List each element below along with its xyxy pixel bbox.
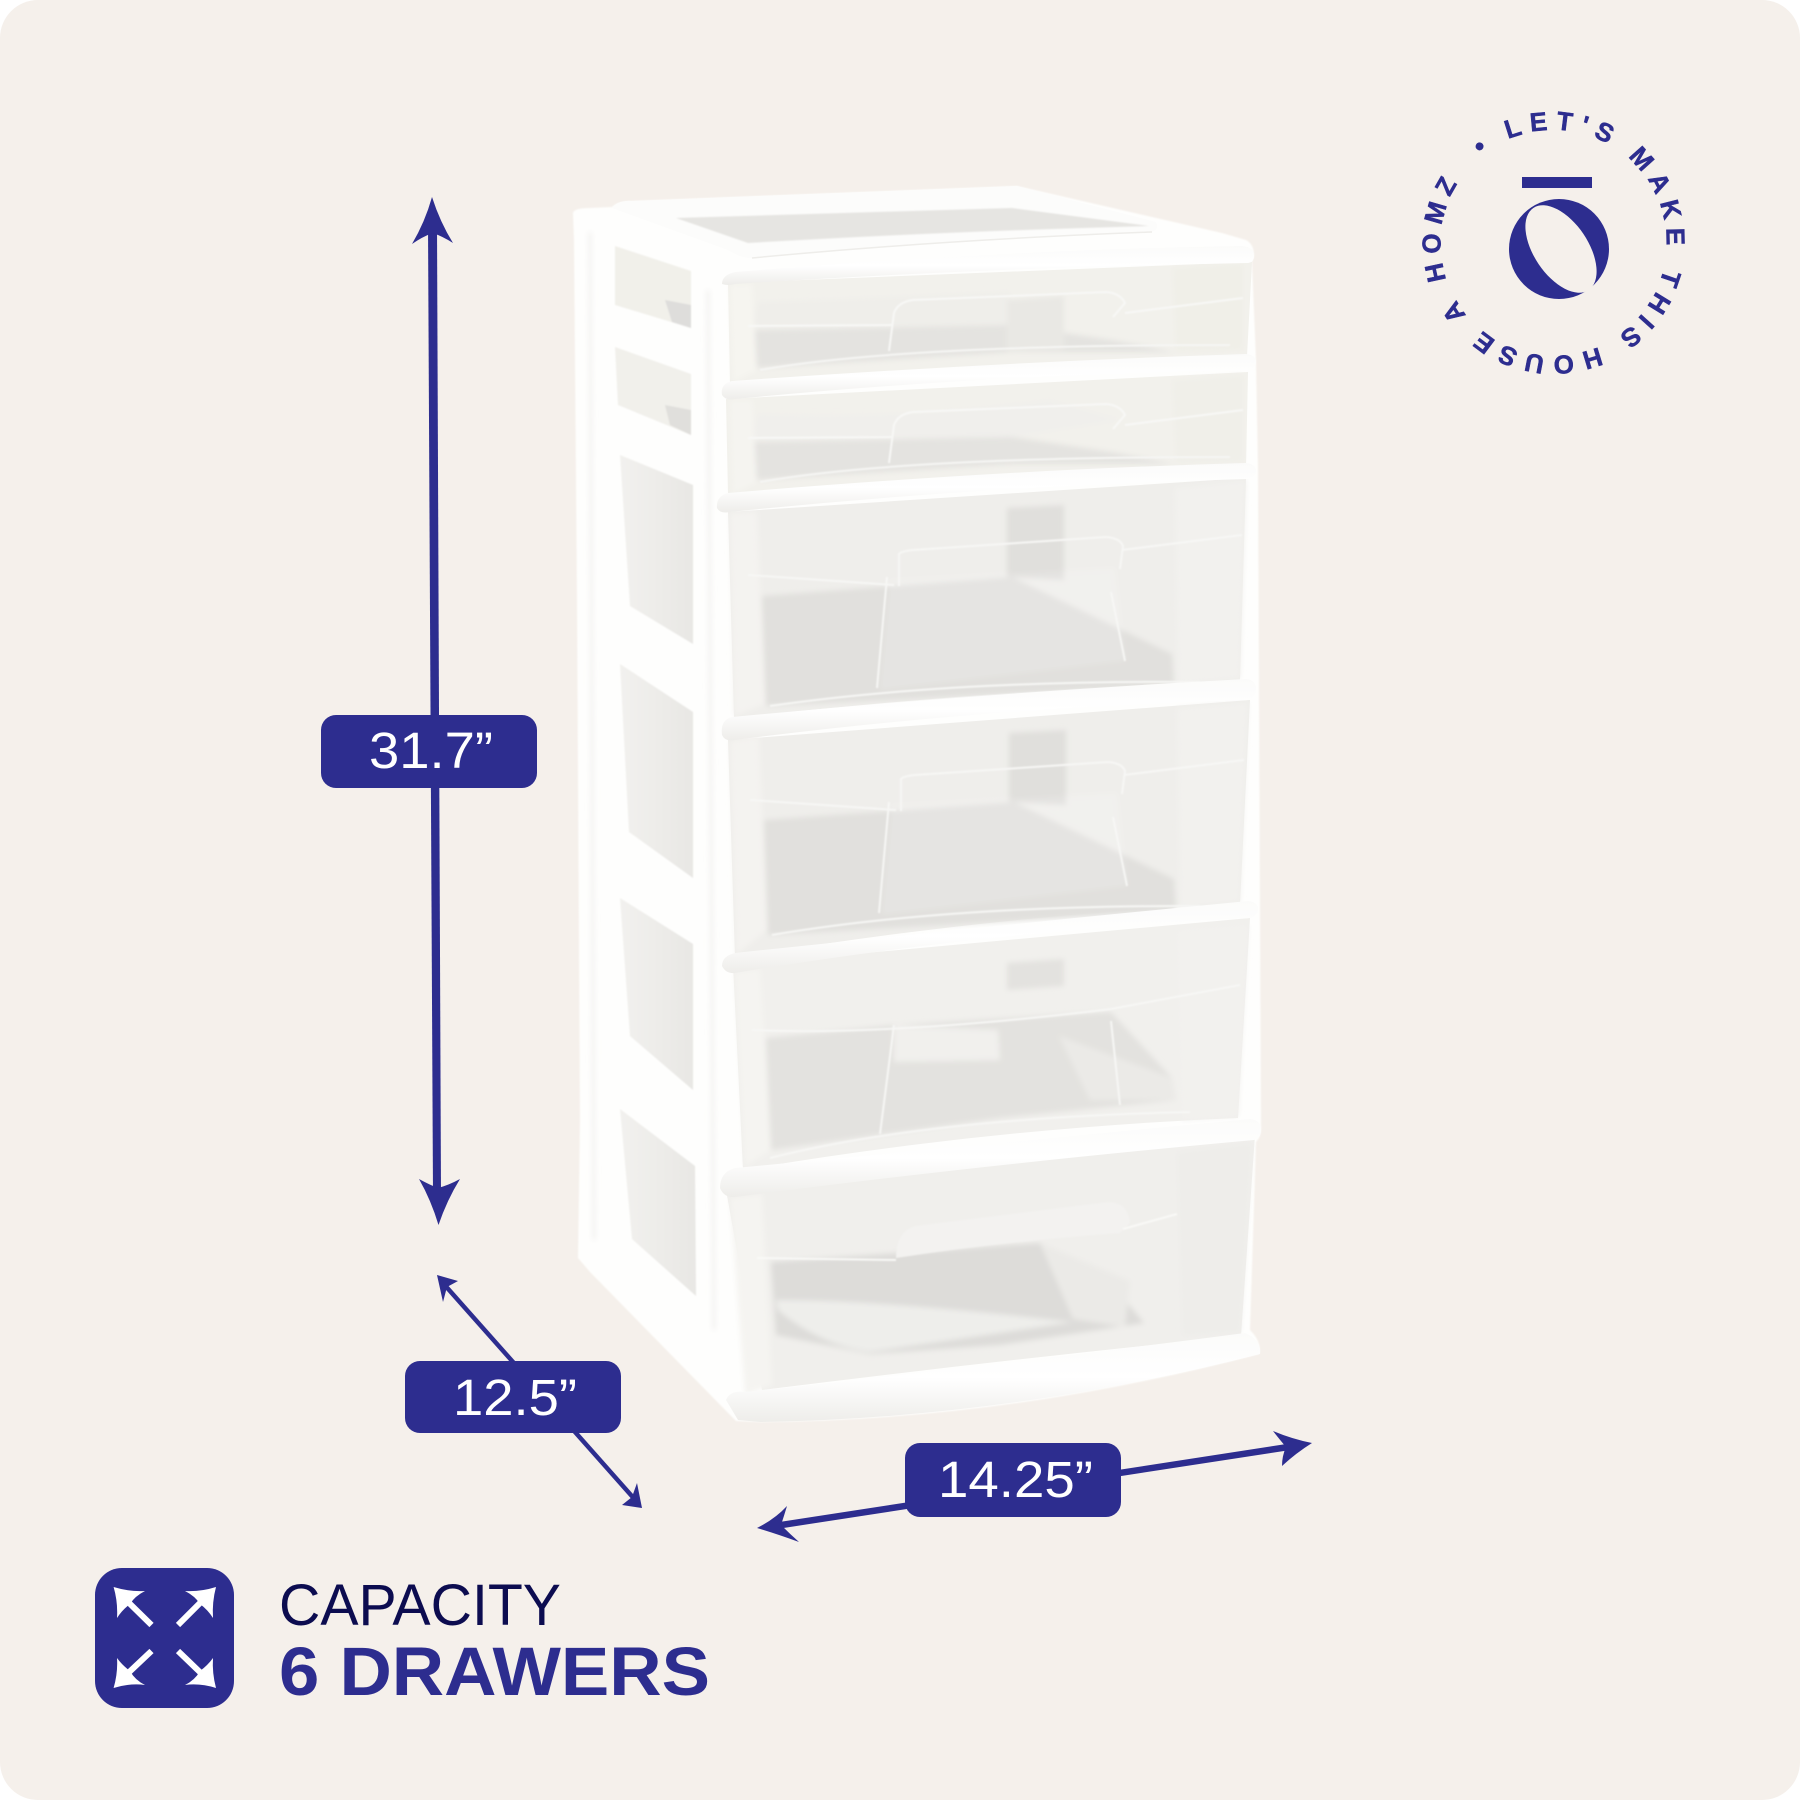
drawer 4 bbox=[728, 700, 1250, 958]
arrow: depth dimension bbox=[437, 1275, 642, 1508]
unit silhouette bbox=[573, 186, 1261, 1422]
handle bbox=[896, 1202, 1130, 1258]
label: depth 12.5: 12.5” bbox=[453, 1369, 577, 1426]
frame post shading bbox=[590, 232, 714, 1330]
drawer 6 bbox=[726, 1135, 1255, 1395]
brand badge bbox=[1422, 111, 1685, 374]
lid bbox=[612, 186, 1157, 258]
logo ring bbox=[1509, 199, 1609, 299]
circular slogan: • LET'S MAKE THIS HOUSE A HOMZ bbox=[1422, 111, 1685, 374]
capacity icon bbox=[95, 1568, 234, 1708]
arrow: height dimension bbox=[412, 197, 460, 1225]
logo bar bbox=[1522, 177, 1592, 188]
label: height 31.7 bbox=[321, 715, 537, 788]
label: width 14.25: 14.25” bbox=[938, 1451, 1093, 1508]
drawer 5 bbox=[733, 918, 1250, 1170]
label: depth 12.5 bbox=[405, 1361, 621, 1433]
product photo: six-drawer plastic storage tower bbox=[573, 186, 1261, 1422]
drawer 2 bbox=[726, 372, 1248, 495]
capacity text bbox=[279, 1573, 710, 1710]
label: height 31.7: 31.7” bbox=[369, 722, 493, 779]
capacity label: CAPACITY bbox=[279, 1573, 561, 1638]
side windows bbox=[615, 246, 696, 1296]
drawer front rails bbox=[717, 246, 1261, 1422]
drawer 3 bbox=[728, 478, 1246, 718]
drawer 1 bbox=[728, 262, 1252, 384]
arrow: width dimension bbox=[757, 1431, 1312, 1542]
capacity value: 6 DRAWERS bbox=[279, 1633, 710, 1710]
label: width 14.25 bbox=[905, 1443, 1121, 1517]
